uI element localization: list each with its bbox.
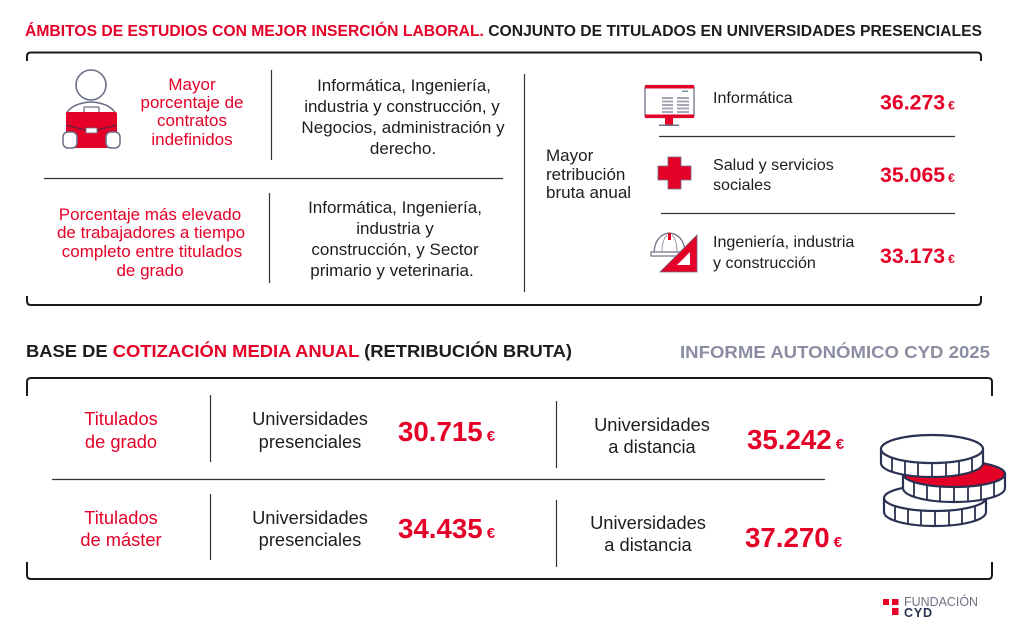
text: máster presencial: presenciales (259, 529, 361, 550)
text: titulados de máster: de máster (80, 529, 162, 550)
value: grado distancia: 35.242 € (747, 424, 845, 455)
value: grado presencial: 30.715 € (398, 416, 496, 447)
panel: contracts and full-time employment (44, 70, 524, 292)
text: pay heading: bruta anual (546, 183, 631, 202)
heading: report name: INFORME AUTONÓMICO CYD 2025 (680, 341, 990, 362)
text: full-time label: completo entre titulados (62, 242, 242, 261)
text: indefinite contracts fields: Negocios, administración y (301, 118, 505, 137)
heading: base de cotización: BASE DE COTIZACIÓN MEDIA ANUAL (RETRIBUCIÓN BRUTA) (26, 340, 572, 361)
logo: Fundación CYD (883, 594, 978, 620)
panel: bottom frame (27, 378, 992, 579)
text: grado presencial: presenciales (259, 431, 361, 452)
panel: top frame (27, 52, 981, 305)
text: grado distancia: a distancia (608, 436, 697, 457)
text: titulados de máster: Titulados (84, 507, 158, 528)
text: indefinite contracts label: porcentaje de (140, 93, 244, 112)
value: salud: 35.065€ (880, 163, 955, 187)
text: indefinite contracts fields: Informática, Ingeniería, (317, 76, 491, 95)
text: informática: Informática (713, 89, 793, 107)
text: indefinite contracts fields: derecho. (370, 139, 436, 158)
value: máster distancia: 37.270 € (745, 522, 843, 553)
text: full-time fields: industria y (356, 219, 434, 238)
text: máster distancia: a distancia (604, 534, 693, 555)
text: máster distancia: Universidades (590, 512, 706, 533)
logo: Fundación CYD: CYD (904, 606, 933, 620)
text: indefinite contracts label: indefinidos (151, 130, 233, 149)
icon: person with briefcase (63, 70, 120, 148)
text: salud: Salud y servicios (713, 156, 834, 174)
title: ÁMBITOS DE ESTUDIOS CON MEJOR INSERCIÓN LABORAL. CONJUNTO DE TITULADOS EN UNIVERSIDADES PRESENCIALES (25, 21, 982, 40)
text: salud: sociales (713, 176, 771, 194)
text: indefinite contracts fields: industria y construcción, y (304, 97, 500, 116)
logo: Fundación CYD: FUNDACIÓN (904, 594, 978, 609)
text: titulados de grado: de grado (85, 431, 157, 452)
text: full-time label: de trabajadores a tiempo (57, 223, 245, 242)
icon: medical cross (658, 157, 691, 189)
icon: helmet and set square (651, 233, 697, 272)
text: grado presencial: Universidades (252, 408, 368, 429)
icon: computer (645, 85, 694, 126)
text: indefinite contracts label: Mayor (168, 75, 216, 94)
panel: graduates table (52, 395, 845, 567)
text: titulados de grado: Titulados (84, 408, 158, 429)
text: full-time fields: construcción, y Sector (311, 240, 479, 259)
value: máster presencial: 34.435 € (398, 513, 496, 544)
panel: highest gross annual pay (546, 85, 955, 272)
text: pay heading: Mayor (546, 146, 594, 165)
text: ingeniería: Ingeniería, industria (713, 233, 854, 251)
text: full-time label: de grado (116, 261, 184, 280)
text: indefinite contracts label: contratos (157, 111, 227, 130)
icon: coins (881, 435, 1005, 526)
text: full-time fields: Informática, Ingeniería, (308, 198, 482, 217)
text: pay heading: retribución (546, 165, 625, 184)
value: informática: 36.273€ (880, 90, 955, 114)
text: ingeniería: y construcción (713, 254, 816, 272)
text: máster presencial: Universidades (252, 507, 368, 528)
text: full-time fields: primario y veterinaria. (310, 261, 474, 280)
text: grado distancia: Universidades (594, 414, 710, 435)
text: full-time label: Porcentaje más elevado (59, 205, 241, 224)
value: ingeniería: 33.173€ (880, 244, 955, 268)
